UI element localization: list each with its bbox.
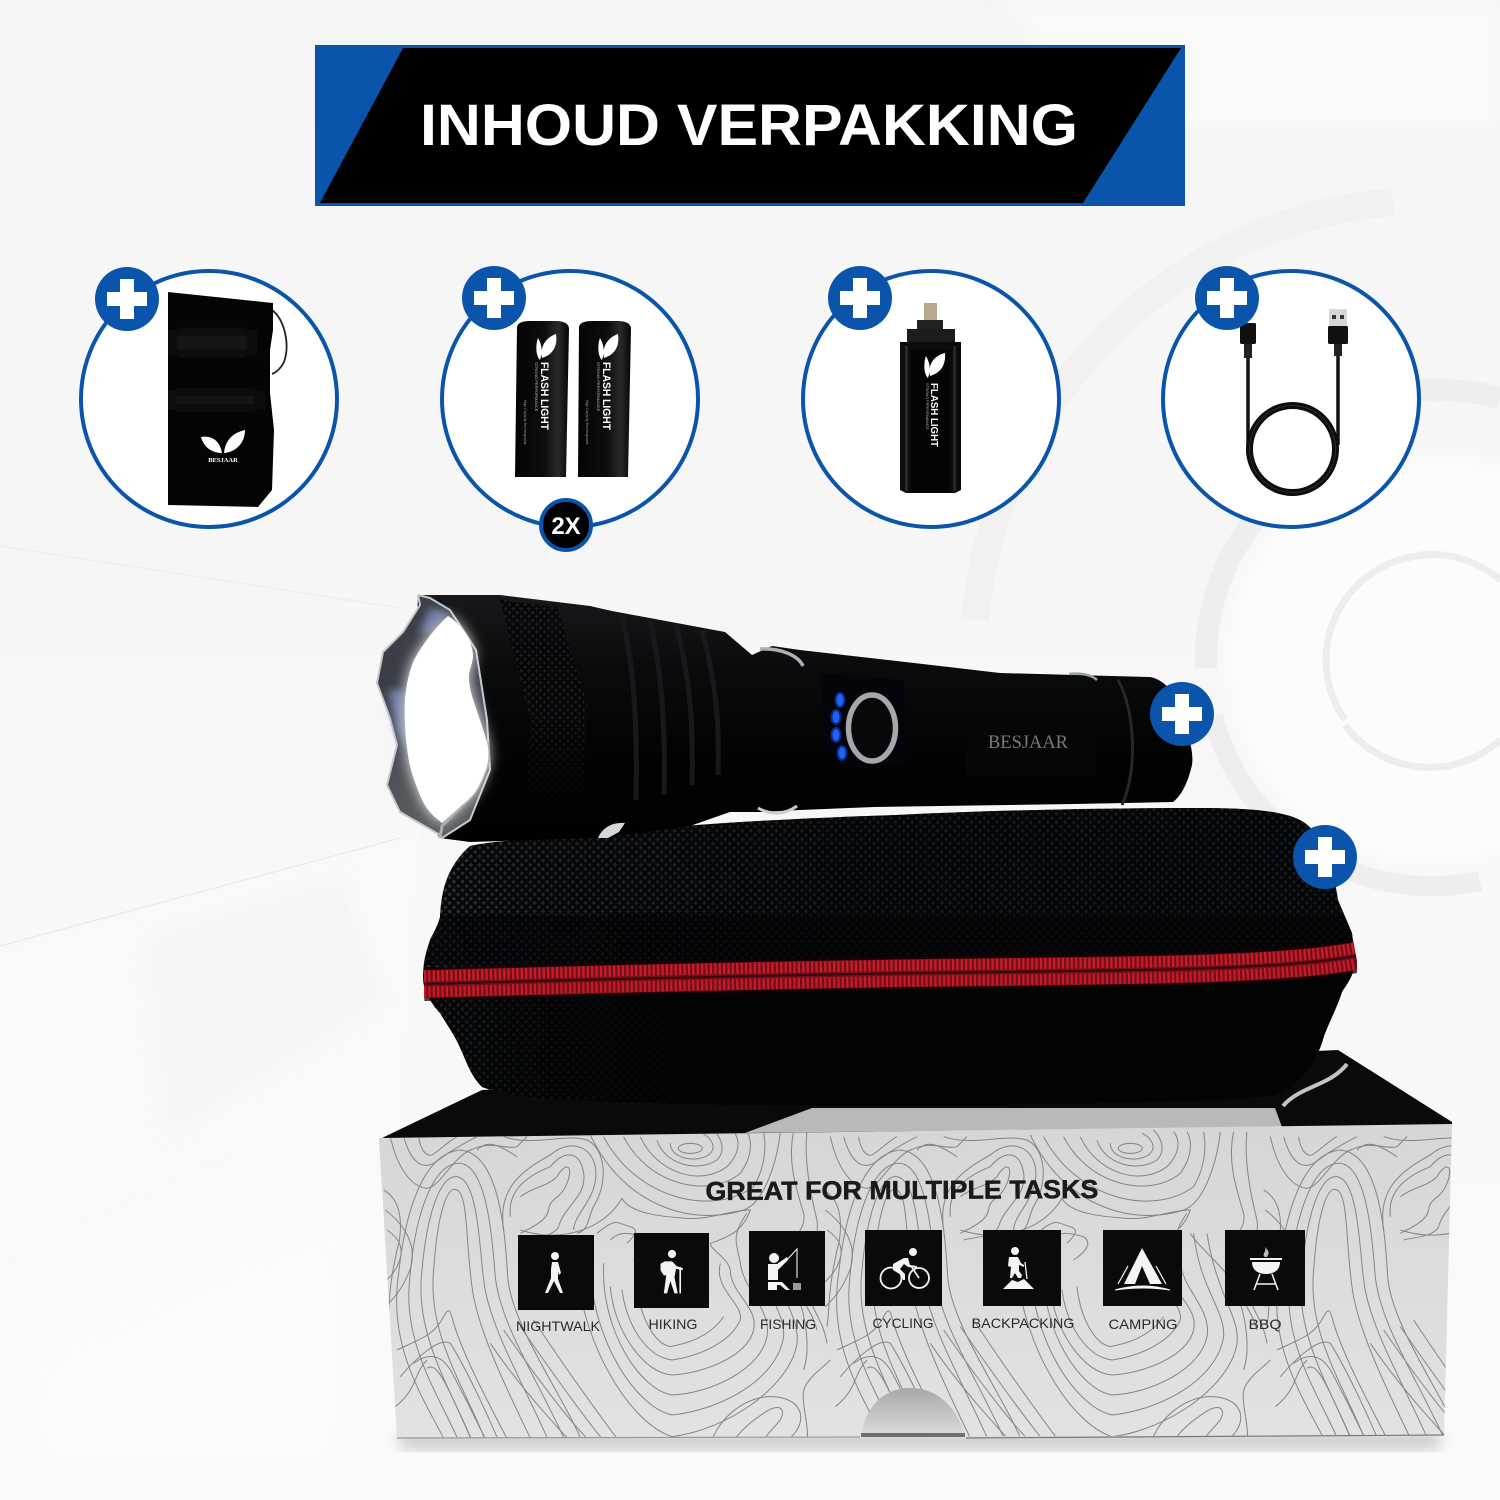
task: hiking: [634, 1233, 709, 1332]
task: BBQ: [1225, 1230, 1305, 1332]
icon: black drawstring pouch: [168, 292, 287, 507]
plus badge: [1195, 266, 1259, 330]
glowing lens: [405, 616, 488, 838]
task: backpacking: [972, 1230, 1074, 1331]
cooling fins: [622, 615, 718, 800]
task: BBQ: BBQ: [1248, 1316, 1282, 1332]
icon: battery left: FLASH LIGHT: [538, 362, 550, 430]
icon: battery right: [578, 321, 631, 477]
product box: [379, 1050, 1500, 1448]
knurled grip: [500, 600, 587, 810]
title banner: [315, 45, 1185, 206]
head bezel: [377, 595, 490, 838]
icon: battery left: [515, 321, 569, 477]
flashlight body: [410, 595, 1192, 842]
task: hiking: HIKING: [648, 1316, 698, 1332]
icon: battery right: STRONG PERFORMANCE: [596, 362, 601, 412]
box heading: GREAT FOR MULTIPLE TASKS: [705, 1174, 1099, 1206]
control panel: [820, 673, 906, 770]
2X quantity badge: 2X: [551, 513, 581, 540]
carrying case: [423, 808, 1357, 1106]
icon: battery adapter tube: [900, 303, 961, 493]
pouch brand text: BESJAAR: [208, 457, 238, 464]
panel: battery adapter: [803, 266, 1059, 527]
engraved logo plate: [966, 713, 1096, 775]
box shadow: [400, 1434, 1440, 1448]
task: fishing: FISHING: [760, 1316, 816, 1332]
task: camping: CAMPING: [1108, 1316, 1178, 1332]
task: cycling: [865, 1230, 942, 1331]
plus badge: [462, 266, 526, 330]
task: nightwalk: NIGHTWALK: [516, 1318, 601, 1334]
icon: battery right: High Capacity Rechargeable: [585, 400, 589, 445]
red zipper: [424, 948, 1356, 992]
task: nightwalk: [516, 1235, 601, 1334]
rim highlights: [598, 823, 625, 838]
panel: pouch: [81, 267, 337, 527]
brand engraving: BESJAAR: [988, 733, 1069, 753]
icon: battery left: High Capacity Rechargeable: [523, 400, 527, 445]
panel: batteries: [442, 266, 698, 550]
box front: [379, 1124, 1500, 1445]
box lid top: [379, 1050, 1452, 1140]
icon: USB cable: [1240, 309, 1348, 492]
topographic lines: [384, 1130, 1500, 1445]
plus badge: [828, 266, 892, 330]
plus badge: [95, 267, 159, 331]
2X quantity badge: [541, 500, 591, 550]
task: fishing: [749, 1231, 825, 1332]
lens glow and bezel tint: [388, 608, 448, 750]
icon: battery right: FLASH LIGHT: [600, 362, 612, 430]
task: camping: [1103, 1230, 1182, 1332]
task: cycling: CYCLING: [872, 1315, 934, 1331]
icon: battery left: STRONG PERFORMANCE: [534, 362, 539, 412]
title text: INHOUD VERPAKKING: [420, 93, 1078, 158]
tail ring: [1118, 680, 1133, 805]
icon: battery adapter tube: STRONG PERFORMANCE: [925, 383, 929, 430]
icon: battery adapter tube: FLASH LIGHT: [928, 383, 939, 447]
battery LEDs: [832, 693, 846, 760]
plus badge: case: [1293, 825, 1357, 889]
plus badge: flashlight: [1150, 682, 1214, 746]
power ring: [848, 695, 896, 761]
flashlight: [377, 595, 1192, 842]
task: backpacking: BACKPACKING: [972, 1315, 1074, 1331]
panel: USB cable: [1163, 266, 1419, 527]
icon: leaf logo: [201, 430, 245, 453]
thumb notch: [861, 1388, 966, 1438]
